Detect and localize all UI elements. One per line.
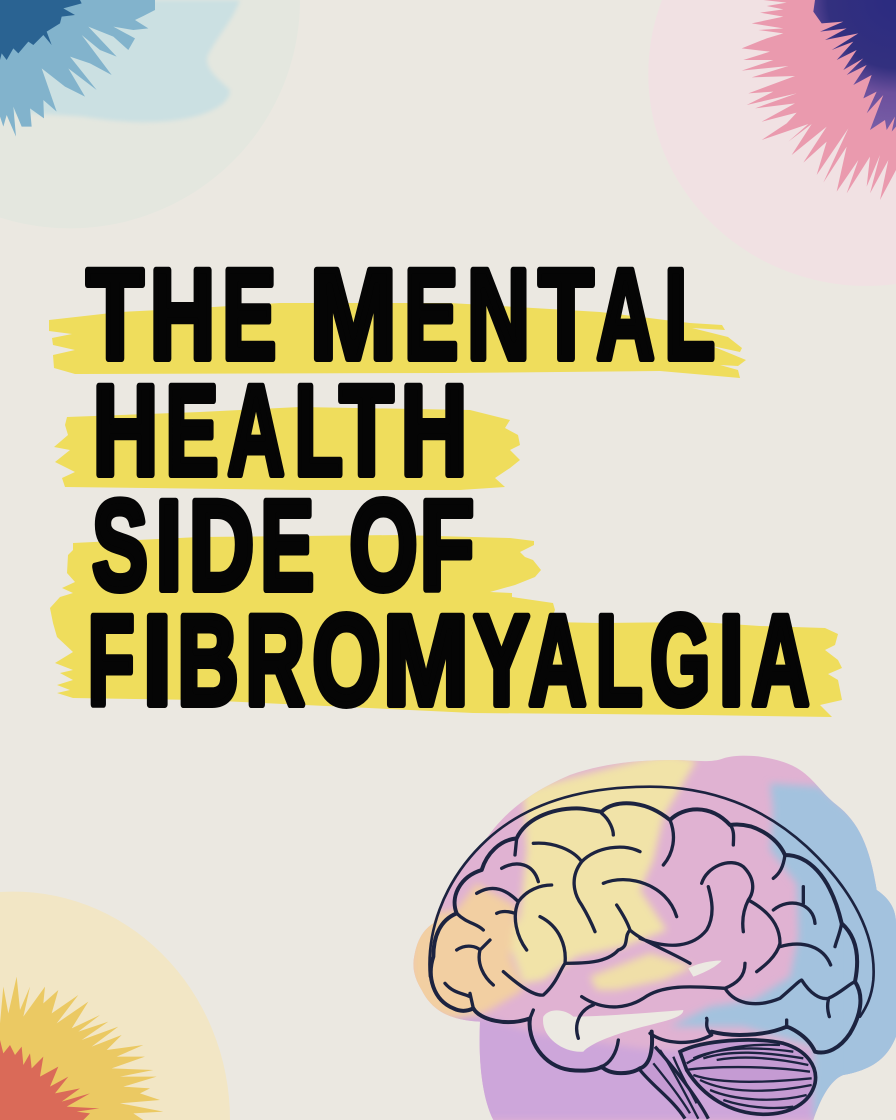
title: S — [92, 474, 148, 618]
highlight stroke: line one — [49, 303, 746, 378]
title: T — [538, 244, 594, 386]
title: A — [528, 590, 586, 732]
title: I — [143, 590, 172, 732]
brain lobes outline — [431, 803, 860, 1073]
title — [86, 244, 810, 732]
title: E — [166, 360, 218, 502]
brain illustration — [410, 750, 896, 1120]
title: T — [340, 360, 394, 502]
title: O — [349, 474, 418, 618]
title: M — [383, 590, 469, 732]
decorative blot: top left blue — [0, 0, 300, 228]
title: B — [177, 590, 239, 732]
title: F — [420, 474, 474, 618]
title: T — [86, 244, 144, 386]
title: Y — [474, 590, 530, 732]
title: H — [150, 244, 215, 386]
outer brain contour arc — [430, 787, 874, 1017]
highlight stroke: line two — [54, 407, 520, 490]
title: E — [404, 244, 458, 386]
watercolor blob behind the brain — [410, 750, 896, 1120]
brain folds — [445, 813, 855, 1067]
highlight stroke: lines three and four — [50, 535, 842, 717]
cerebellum — [640, 1040, 816, 1119]
title: A — [752, 590, 810, 732]
title: O — [312, 590, 381, 732]
title: H — [401, 360, 467, 502]
decorative blot: top right pink and purple — [648, 0, 896, 286]
title: R — [245, 590, 305, 732]
yellow highlighter strokes behind the title — [49, 303, 842, 717]
title: E — [260, 474, 314, 618]
title: L — [294, 360, 343, 502]
title: I — [719, 590, 744, 732]
white highlights in temporal lobe — [543, 961, 722, 1052]
title: A — [228, 360, 284, 502]
title: N — [467, 244, 530, 386]
title: M — [310, 244, 397, 386]
title: E — [222, 244, 276, 386]
title: A — [596, 244, 654, 386]
decorative blot: bottom left yellow and red — [0, 892, 230, 1120]
title: L — [596, 590, 643, 732]
title: D — [189, 474, 254, 618]
title: H — [93, 360, 158, 502]
title: F — [88, 590, 135, 732]
title: L — [664, 244, 715, 386]
title: I — [155, 474, 182, 618]
title: G — [650, 590, 710, 732]
